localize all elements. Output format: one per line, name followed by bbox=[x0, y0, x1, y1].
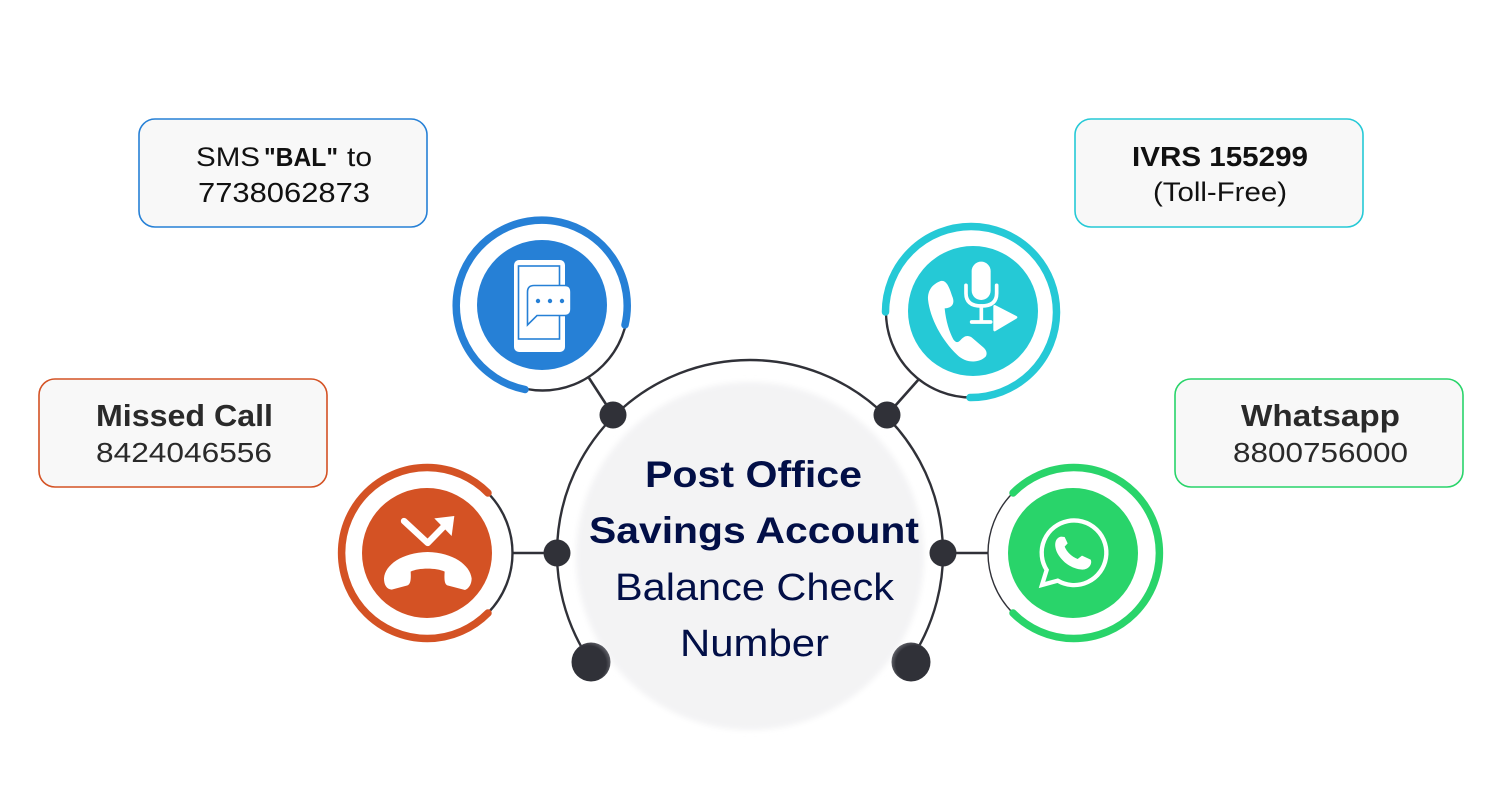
icon: IVRS phone and mic bbox=[886, 226, 1057, 398]
hub title: Number bbox=[680, 623, 829, 665]
panel: IVRS bbox=[1075, 119, 1363, 227]
end node: right bbox=[892, 642, 930, 682]
SMS text: "BAL" bbox=[264, 142, 338, 172]
IVRS text: (Toll-Free) bbox=[1153, 177, 1287, 207]
panel: SMS bbox=[139, 119, 427, 227]
centre hub bbox=[557, 360, 943, 730]
WhatsApp text: 8800756000 bbox=[1233, 437, 1408, 468]
connector: WhatsApp bbox=[930, 540, 988, 566]
SMS text: 7738062873 bbox=[198, 177, 370, 208]
hub title bbox=[589, 453, 920, 665]
SMS text bbox=[196, 142, 372, 208]
connector: IVRS bbox=[874, 379, 919, 428]
missed call text: 8424046556 bbox=[96, 437, 272, 468]
end node: left bbox=[572, 642, 610, 682]
hub ring bbox=[557, 360, 943, 662]
IVRS text bbox=[1132, 141, 1308, 207]
hub title: Post Office bbox=[645, 453, 862, 495]
panel: missed call bbox=[39, 379, 327, 487]
SMS text: SMS bbox=[196, 142, 260, 172]
icon: missed call bbox=[342, 468, 512, 638]
icon: SMS phone bbox=[456, 220, 628, 390]
hub title: Balance Check bbox=[615, 567, 895, 609]
IVRS text: IVRS 155299 bbox=[1132, 141, 1308, 172]
WhatsApp text: Whatsapp bbox=[1241, 398, 1400, 433]
missed call text: Missed Call bbox=[96, 398, 273, 433]
hub title: Savings Account bbox=[589, 509, 920, 551]
connector: SMS bbox=[589, 378, 626, 428]
connector: missed call bbox=[513, 540, 570, 566]
SMS text: to bbox=[347, 142, 372, 172]
missed call text bbox=[96, 398, 273, 468]
hub disc bbox=[576, 382, 924, 730]
WhatsApp text bbox=[1233, 398, 1408, 468]
icon: WhatsApp bbox=[988, 468, 1159, 638]
panel: WhatsApp bbox=[1175, 379, 1463, 487]
